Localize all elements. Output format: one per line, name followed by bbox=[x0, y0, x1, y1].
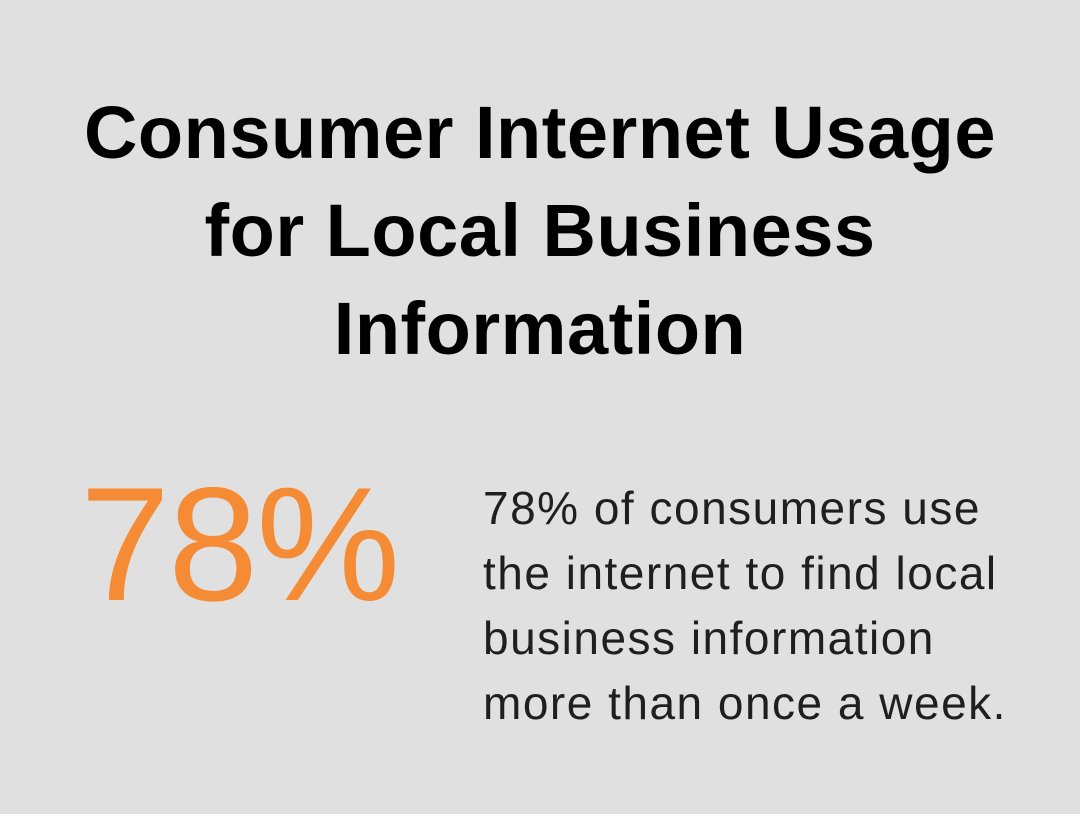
title: for Local Business bbox=[204, 189, 876, 272]
description text bbox=[483, 482, 1007, 729]
description text: 78% of consumers use bbox=[483, 482, 981, 534]
title bbox=[84, 91, 996, 370]
title: Information bbox=[334, 287, 746, 370]
big statistic: 78%: 78% bbox=[80, 454, 398, 635]
title: Consumer Internet Usage bbox=[84, 91, 996, 174]
description text: more than once a week. bbox=[483, 677, 1007, 729]
description text: business information bbox=[483, 612, 935, 664]
description text: the internet to find local bbox=[483, 547, 998, 599]
